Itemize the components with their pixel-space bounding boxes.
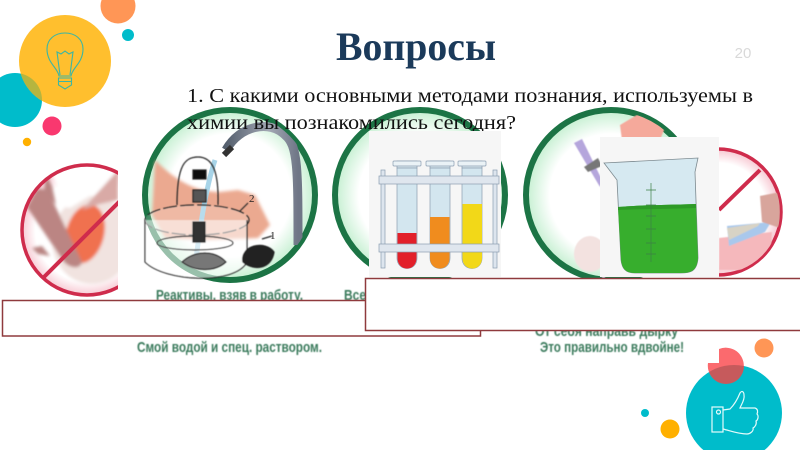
panel: prohibited sign right (719, 147, 783, 277)
poster captions: Смой водой и спец. раствором. (137, 339, 322, 356)
panel: green circle 1: 1 (270, 230, 276, 242)
liquid: yellow (462, 204, 482, 268)
image: test tubes in rack (369, 131, 501, 277)
illustration: hand with test tube (574, 112, 670, 280)
blank answer box left (2, 300, 480, 336)
panel: green circle 3 (526, 110, 696, 280)
poster captions: От себя направь дырку (535, 323, 679, 340)
callout numbers: 2 (249, 193, 254, 205)
panel: prohibited sign left (20, 163, 118, 297)
liquid: green (618, 204, 698, 273)
illustration: glass apparatus (145, 157, 274, 278)
illustration: hand over a jar (27, 166, 118, 284)
icon: light bulb (47, 33, 83, 89)
panel: green circle 2 (335, 110, 505, 280)
question text (187, 85, 753, 134)
illustration: pipette hand (719, 192, 780, 270)
blank answer box right (366, 278, 800, 330)
image: beaker with green liquid (600, 137, 719, 277)
poster captions: Реактивы, взяв в работу, (156, 287, 303, 304)
title: Вопросы (336, 24, 496, 69)
question text: 1. С какими основными методами познания, используемы в (187, 85, 753, 107)
panel: green circle 1 (145, 110, 315, 280)
decorative circles: top left (0, 0, 136, 146)
poster captions: Все (344, 287, 366, 304)
decorative circles: bottom right (641, 338, 782, 450)
poster captions: Это правильно вдвойне! (540, 339, 684, 356)
poster captions (137, 287, 684, 356)
liquid: red (398, 233, 416, 268)
question text: химии вы познакомились сегодня? (187, 112, 516, 134)
page number: 20 (735, 45, 751, 62)
icon: thumbs up (712, 392, 758, 434)
illustration: hands under tap (152, 127, 298, 268)
liquid: orange (430, 217, 450, 268)
